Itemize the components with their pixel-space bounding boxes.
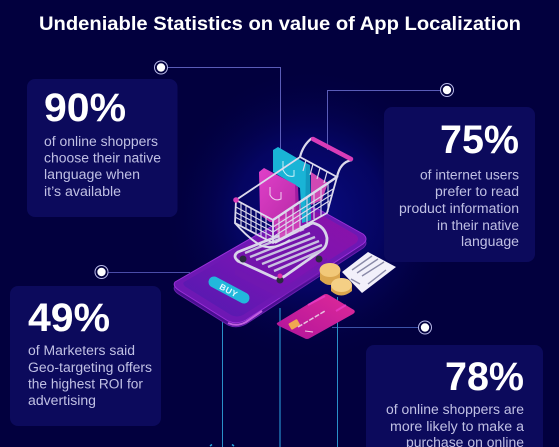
panel: 75% statistic <box>384 107 535 262</box>
panel: 49% statistic: Geo-targeting offers <box>28 360 152 375</box>
connector lines <box>108 68 440 447</box>
panel: 78% statistic: more likely to make a <box>390 419 525 434</box>
panel: 75% statistic: 75% <box>440 118 519 162</box>
panel: 90% statistic: language when <box>44 167 140 182</box>
connector dot: 49% <box>95 266 108 278</box>
connector dot: 75% <box>440 84 454 96</box>
panel: 78% statistic: of online shoppers are <box>386 402 524 417</box>
panel: 49% statistic: the highest ROI for <box>28 376 144 392</box>
panel: 90% statistic: it’s available <box>44 184 121 199</box>
cart lower tray <box>235 223 327 278</box>
panel: 75% statistic: of internet users <box>420 168 519 182</box>
panel: 49% statistic: advertising <box>28 393 96 408</box>
title: Undeniable Statistics on value of App Localization <box>39 14 521 35</box>
magenta bag <box>259 168 300 238</box>
panel: 75% statistic: product information <box>399 201 519 216</box>
credit card <box>277 294 355 339</box>
cyan bag <box>273 147 311 223</box>
panel: 90% statistic: choose their native <box>44 150 161 166</box>
panel: 90% statistic: 90% <box>44 86 126 130</box>
panel: 75% statistic: in their native <box>437 218 519 233</box>
panel: 75% statistic: language <box>461 234 519 249</box>
panel: 78% statistic <box>366 345 543 447</box>
coins <box>320 263 352 296</box>
illustration: phone with shopping cart <box>174 138 396 339</box>
connector dot: 78% <box>418 321 432 334</box>
cart handle <box>313 139 351 159</box>
pink bag at back <box>311 172 328 205</box>
cart wheels <box>240 256 322 284</box>
panel: 78% statistic: 78% <box>445 355 524 399</box>
panel: 90% statistic <box>27 79 178 217</box>
connector dot: 90% <box>154 61 168 74</box>
receipt <box>342 252 396 293</box>
panel: 90% statistic: of online shoppers <box>44 134 158 149</box>
phone <box>174 208 366 327</box>
cart basket <box>235 138 352 247</box>
panel: 49% statistic: 49% <box>28 296 110 340</box>
panel: 75% statistic: prefer to read <box>435 184 519 199</box>
buy button: BUY <box>218 281 240 299</box>
panel: 49% statistic: of Marketers said <box>28 343 135 358</box>
panel: 49% statistic <box>10 286 161 426</box>
cart shadow on phone <box>235 258 327 298</box>
